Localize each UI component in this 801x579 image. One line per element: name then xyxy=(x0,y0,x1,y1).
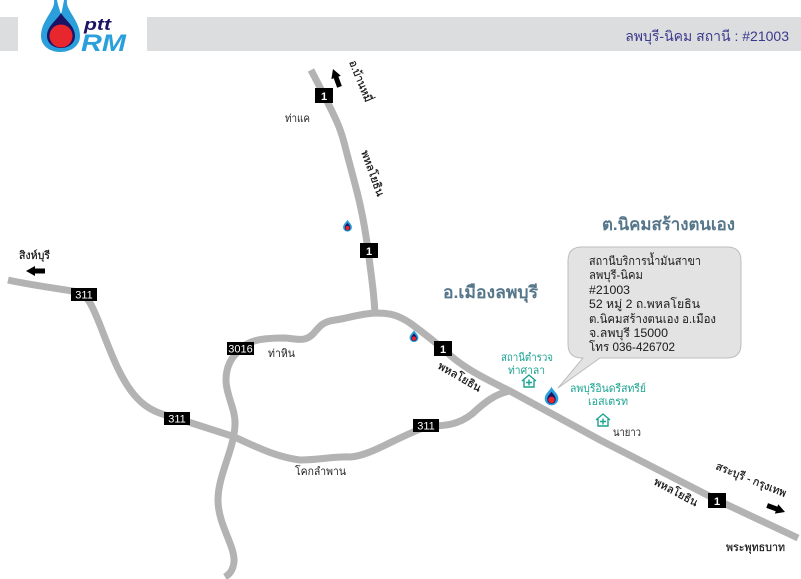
place labels: พระพุทธบาท xyxy=(726,542,785,554)
landmark: police station: สถานีตำรวจ xyxy=(501,351,553,364)
shields: route numbers: 1 xyxy=(714,496,720,508)
district headings: อ.เมืองลพบุรี xyxy=(443,282,539,303)
place labels: ท่าแค xyxy=(285,113,310,125)
shields: route numbers: 1 xyxy=(440,344,446,356)
callout: station address xyxy=(558,247,741,388)
callout: station address: 52 หมู่ 2 ถ.พหลโยธิน xyxy=(589,297,700,312)
landmark: police station: ท่าศาลา xyxy=(508,365,545,377)
rotated road labels: พหลโยธิน xyxy=(358,148,388,199)
shields: route numbers: 311 xyxy=(75,290,93,302)
icon: station marker north xyxy=(343,219,352,232)
shields: route numbers: 311 xyxy=(417,420,435,432)
district headings: ต.นิคมสร้างตนเอง xyxy=(602,215,735,234)
rotated road labels: พหลโยธิน xyxy=(652,474,701,509)
logo: PTT RM: RM xyxy=(81,30,127,57)
shields: route numbers: 1 xyxy=(321,91,327,103)
shields: route numbers: 3016 xyxy=(228,344,253,356)
shields: route numbers: 1 xyxy=(366,246,372,258)
shields: route numbers xyxy=(71,88,726,508)
header station title: ลพบุรี-นิคม สถานี : #21003 xyxy=(625,28,789,45)
header bar right xyxy=(147,17,801,51)
callout: station address: จ.ลพบุรี 15000 xyxy=(589,326,668,341)
rotated road labels: สระบุรี - กรุงเทพ xyxy=(714,460,788,500)
callout: station address: ลพบุรี-นิคม xyxy=(589,268,643,283)
place labels: สิงห์บุรี xyxy=(19,249,50,262)
rotated road labels: พหลโยธิน xyxy=(436,358,484,395)
callout: station address: ต.นิคมสร้างตนเอง อ.เมือง xyxy=(589,312,716,326)
place labels: โคกลำพาน xyxy=(295,464,346,478)
district headings xyxy=(443,215,735,303)
rotated road labels xyxy=(346,58,788,509)
landmark: Lopburi Inn Resort: ลพบุรีอินดรีสทรีย์ xyxy=(570,382,646,395)
shields: route numbers: 311 xyxy=(168,414,186,426)
callout: station address: #21003 xyxy=(589,283,630,297)
callout: station address: สถานีบริการน้ำมันสาขา xyxy=(589,252,701,268)
landmark: Lopburi Inn Resort xyxy=(570,382,646,426)
logo: PTT RM: ptt xyxy=(83,15,113,34)
landmark: police station xyxy=(501,351,553,387)
direction arrows xyxy=(26,67,787,517)
place labels: นายาว xyxy=(613,427,641,439)
icon: station marker loop xyxy=(410,330,418,342)
callout: station address: โทร 036-426702 xyxy=(589,340,675,354)
landmark: Lopburi Inn Resort: เอสเตรท xyxy=(588,396,628,408)
header bar left xyxy=(0,17,18,51)
logo: PTT RM xyxy=(41,0,127,57)
icon: station marker main xyxy=(545,387,558,405)
rotated road labels: อ.บ้านหมี่ xyxy=(346,58,377,104)
place labels: ท่าหิน xyxy=(268,348,295,360)
place labels xyxy=(19,113,785,554)
